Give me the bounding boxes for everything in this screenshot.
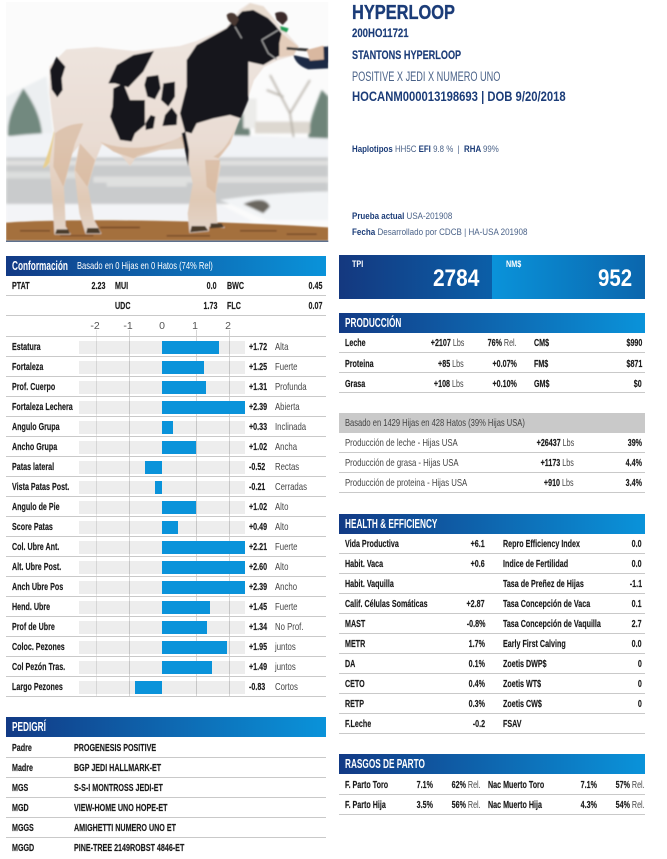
trait row: Alt. Ubre Post.: Alt. Ubre Post. bbox=[12, 561, 61, 573]
panel: calving traits bbox=[339, 754, 645, 815]
production row: Grasa: +108 Lbs bbox=[434, 378, 464, 390]
health row 5: -0.8% bbox=[466, 618, 485, 630]
pedigree row: MGS bbox=[6, 777, 326, 798]
registration code: 200HO11721 bbox=[352, 26, 409, 40]
trait row: Patas lateral bbox=[6, 456, 326, 477]
calving row: daughter: 56% Rel. bbox=[452, 799, 481, 811]
health row 3: Tasa de Preñez de Hijas bbox=[503, 578, 584, 590]
trait row: Angulo de Pie: +1.02 bbox=[249, 501, 267, 513]
trait row: Hend. Ubre: +1.45 bbox=[249, 601, 267, 613]
trait row: Coloc. Pezones: Coloc. Pezones bbox=[12, 641, 65, 653]
calving heading: RASGOS DE PARTO bbox=[345, 757, 425, 771]
trait row: Angulo Grupa: Inclinada bbox=[275, 421, 306, 433]
trait row: Angulo de Pie: Angulo de Pie bbox=[12, 501, 60, 513]
trait row: Col. Ubre Ant.: +2.21 bbox=[249, 541, 267, 553]
trait row: Vista Patas Post.: Vista Patas Post. bbox=[12, 481, 69, 493]
pedigree row: Madre: Madre bbox=[12, 762, 33, 774]
calving row: bull: 57% Rel. bbox=[616, 779, 645, 791]
production row: Proteina: FM$ bbox=[534, 358, 548, 370]
bull name heading: HYPERLOOP bbox=[352, 2, 455, 24]
health row 1 bbox=[339, 534, 645, 554]
health row 4: +2.87 bbox=[467, 598, 485, 610]
health row 9: RETP bbox=[345, 698, 364, 710]
trait row: Ancho Grupa: Ancho Grupa bbox=[12, 441, 57, 453]
summary row PTAT: 0.45 bbox=[308, 280, 322, 292]
trait row: Largo Pezones: -0.83 bbox=[249, 681, 265, 693]
health row 6: METR bbox=[345, 638, 365, 650]
trait row: Angulo Grupa: Angulo Grupa bbox=[12, 421, 60, 433]
health row 8 bbox=[339, 674, 645, 694]
health row 4: Tasa Concepción de Vaca bbox=[503, 598, 590, 610]
trait row: Col Pezón Tras. bbox=[6, 656, 326, 677]
trait row: Hend. Ubre: Fuerte bbox=[275, 601, 297, 613]
conformation heading bbox=[6, 256, 326, 276]
trait row: Fortaleza Lechera bbox=[6, 396, 326, 417]
health row 5: 2.7 bbox=[632, 618, 642, 630]
panel: production bbox=[339, 313, 645, 493]
health row 7: Zoetis DWP$ bbox=[503, 658, 547, 670]
summary row PTAT: PTAT bbox=[12, 280, 30, 292]
trait row: Vista Patas Post.: Cerradas bbox=[275, 481, 307, 493]
health heading: HEALTH & EFFICIENCY bbox=[345, 517, 437, 531]
pedigree row: MGD bbox=[6, 797, 326, 818]
health row 2: Habit. Vaca bbox=[345, 558, 383, 570]
health row 6: 1.7% bbox=[469, 638, 485, 650]
trait row: Hend. Ubre bbox=[6, 596, 326, 617]
trait row: Hend. Ubre: Hend. Ubre bbox=[12, 601, 50, 613]
trait row: Angulo de Pie: Alto bbox=[275, 501, 288, 513]
health row 10: -0.2 bbox=[473, 718, 485, 730]
trait row: Anch Ubre Pos: +2.39 bbox=[249, 581, 267, 593]
calving heading bbox=[339, 754, 645, 774]
health row 9 bbox=[339, 694, 645, 714]
daughters row: grasa: Producción de grasa - Hijas USA bbox=[345, 457, 459, 469]
production row: Grasa bbox=[339, 373, 645, 393]
trait row: Ancho Grupa: Ancha bbox=[275, 441, 297, 453]
pedigree row: MGGD bbox=[12, 842, 184, 854]
health row 1: Vida Productiva bbox=[345, 538, 399, 550]
pedigree row: Padre bbox=[6, 737, 326, 758]
chart axis: 0 bbox=[159, 320, 165, 332]
pedigree heading: PEDIGRÍ bbox=[12, 720, 46, 734]
panel: pedigree bbox=[6, 717, 326, 854]
trait row: Anch Ubre Pos: Ancho bbox=[275, 581, 297, 593]
trait row: Estatura: Alta bbox=[275, 341, 288, 353]
pedigree row: MGD: MGD bbox=[12, 802, 29, 814]
trait row: Col. Ubre Ant.: Col. Ubre Ant. bbox=[12, 541, 59, 553]
health row 2: 0.0 bbox=[632, 558, 642, 570]
health row 10 bbox=[339, 714, 645, 734]
calving row: bull: 7.1% bbox=[581, 779, 597, 791]
daughters basis banner: Basado en 1429 Hijas en 428 Hatos (39% Hijas USA) bbox=[345, 417, 525, 429]
trait row: Prof. Cuerpo: +1.31 bbox=[249, 381, 267, 393]
trait row: Score Patas: Score Patas bbox=[12, 521, 53, 533]
health row 3: Habit. Vaquilla bbox=[345, 578, 394, 590]
health row 2: Indice de Fertilidad bbox=[503, 558, 568, 570]
health row 7 bbox=[339, 654, 645, 674]
health row 1: Repro Efficiency Index bbox=[503, 538, 580, 550]
trait row: Angulo Grupa bbox=[6, 416, 326, 437]
health row 7: 0.1% bbox=[469, 658, 485, 670]
health row 9: 0.3% bbox=[469, 698, 485, 710]
production row: Grasa: +0.10% bbox=[493, 378, 517, 390]
calving row: daughter: 54% Rel. bbox=[616, 799, 645, 811]
TPI label: TPI bbox=[352, 259, 363, 269]
calving row: daughter: 4.3% bbox=[581, 799, 597, 811]
trait row: Prof. Cuerpo: Prof. Cuerpo bbox=[12, 381, 55, 393]
calving row: bull: 62% Rel. bbox=[452, 779, 481, 791]
health row 8: 0 bbox=[638, 678, 642, 690]
production row: Grasa: $0 bbox=[634, 378, 642, 390]
health row 5 bbox=[339, 614, 645, 634]
production row: Proteina: +85 Lbs bbox=[438, 358, 464, 370]
daughters row: leche: Producción de leche - Hijas USA bbox=[345, 437, 458, 449]
health row 8: Zoetis WT$ bbox=[503, 678, 541, 690]
summary row PTAT bbox=[6, 276, 326, 296]
trait row: Alt. Ubre Post. bbox=[6, 556, 326, 577]
conformation heading: Conformación bbox=[12, 259, 68, 273]
trait row: Vista Patas Post. bbox=[6, 476, 326, 497]
daughters row: proteina: Producción de proteina - Hijas USA bbox=[345, 477, 467, 489]
trait row: Prof. Cuerpo bbox=[6, 376, 326, 397]
health row 4: 0.1 bbox=[632, 598, 642, 610]
calving row: bull: 7.1% bbox=[417, 779, 433, 791]
production row: Grasa: GM$ bbox=[534, 378, 549, 390]
trait row: Fortaleza: +1.25 bbox=[249, 361, 267, 373]
pedigree row: MGD: VIEW-HOME UNO HOPE-ET bbox=[74, 802, 167, 814]
trait row: Patas lateral: -0.52 bbox=[249, 461, 265, 473]
pedigree row: MGS: S-S-I MONTROSS JEDI-ET bbox=[74, 782, 163, 794]
chart axis: -2 bbox=[90, 320, 100, 332]
health row 2 bbox=[339, 554, 645, 574]
daughters row: proteina bbox=[339, 473, 645, 493]
trait row: Prof de Ubre: Prof de Ubre bbox=[12, 621, 55, 633]
calving row: daughter: F. Parto Hija bbox=[345, 799, 386, 811]
trait row: Col Pezón Tras.: +1.49 bbox=[249, 661, 267, 673]
trait row: Alt. Ubre Post.: Alto bbox=[275, 561, 288, 573]
production row: Leche: CM$ bbox=[534, 337, 549, 349]
trait row: Ancho Grupa bbox=[6, 436, 326, 457]
production row: Leche: $990 bbox=[626, 337, 642, 349]
production row: Leche: +2107 Lbs bbox=[430, 337, 464, 349]
health row 7: DA bbox=[345, 658, 355, 670]
trait row: Coloc. Pezones: juntos bbox=[275, 641, 296, 653]
trait row: Anch Ubre Pos bbox=[6, 576, 326, 597]
trait row: Fortaleza Lechera: +2.39 bbox=[249, 401, 267, 413]
panel: health and efficiency bbox=[339, 514, 645, 734]
pedigree row: MGS: MGS bbox=[12, 782, 28, 794]
daughters row: grasa bbox=[339, 453, 645, 473]
health row 6: 0.0 bbox=[632, 638, 642, 650]
daughters row: leche bbox=[339, 433, 645, 453]
summary row PTAT: 2.23 bbox=[91, 280, 105, 292]
health row 5: Tasa Concepción de Vaquilla bbox=[503, 618, 601, 630]
trait row: Anch Ubre Pos: Anch Ubre Pos bbox=[12, 581, 63, 593]
pedigree row: MGGS: MGGS bbox=[12, 822, 34, 834]
daughters row: leche: +26437 Lbs bbox=[536, 437, 574, 449]
trait row: Col. Ubre Ant.: Fuerte bbox=[275, 541, 297, 553]
trait row: Angulo de Pie bbox=[6, 496, 326, 517]
photo: Holstein bull standing in snow bbox=[6, 2, 328, 242]
health row 3 bbox=[339, 574, 645, 594]
production row: Leche bbox=[339, 333, 645, 353]
trait row: Estatura: Estatura bbox=[12, 341, 41, 353]
trait row: Score Patas: Alto bbox=[275, 521, 288, 533]
health row 8: 0.4% bbox=[469, 678, 485, 690]
health row 5: MAST bbox=[345, 618, 365, 630]
trait row: Fortaleza bbox=[6, 356, 326, 377]
trait row: Fortaleza: Fuerte bbox=[275, 361, 297, 373]
full name: STANTONS HYPERLOOP bbox=[352, 48, 461, 62]
summary row UDC: UDC bbox=[115, 300, 130, 312]
summary row PTAT: BWC bbox=[227, 280, 244, 292]
current proof text: Prueba actual USA-201908 bbox=[352, 211, 452, 222]
health heading bbox=[339, 514, 645, 534]
ID and date of birth: HOCANM000013198693 | DOB 9/20/2018 bbox=[352, 89, 566, 104]
chart axis: 1 bbox=[192, 320, 198, 332]
NM$ value: 952 bbox=[598, 265, 632, 292]
trait row: Estatura: +1.72 bbox=[249, 341, 267, 353]
daughters row: leche: 39% bbox=[628, 437, 642, 449]
pedigree row: Padre: Padre bbox=[12, 742, 32, 754]
health row 4: Calif. Células Somáticas bbox=[345, 598, 428, 610]
calving row: daughter: Nac Muerto Hija bbox=[488, 799, 542, 811]
production row: Grasa: Grasa bbox=[345, 378, 365, 390]
trait row: Score Patas: +0.49 bbox=[249, 521, 267, 533]
health row 10: F.Leche bbox=[345, 718, 371, 730]
trait row: Col Pezón Tras.: juntos bbox=[275, 661, 296, 673]
pedigree row: Madre bbox=[6, 757, 326, 778]
summary row PTAT: 0.0 bbox=[207, 280, 217, 292]
health row 6: Early First Calving bbox=[503, 638, 566, 650]
panel: TPI score bbox=[339, 255, 492, 299]
calving row: daughter: 3.5% bbox=[417, 799, 433, 811]
health row 10: FSAV bbox=[503, 718, 522, 730]
health row 1: 0.0 bbox=[632, 538, 642, 550]
pedigree row: MGGS bbox=[6, 817, 326, 838]
pedigree row: MGGD: MGGD bbox=[12, 842, 34, 854]
trait row: Prof. Cuerpo: Profunda bbox=[275, 381, 307, 393]
health row 8: CETO bbox=[345, 678, 365, 690]
pedigree row: Madre: BGP JEDI HALLMARK-ET bbox=[74, 762, 161, 774]
pedigree row: MGGD: PINE-TREE 2149ROBST 4846-ET bbox=[74, 842, 184, 854]
trait row: Coloc. Pezones bbox=[6, 636, 326, 657]
trait row: Patas lateral: Rectas bbox=[275, 461, 299, 473]
calving row: daughter bbox=[339, 794, 645, 815]
health row 1: +6.1 bbox=[471, 538, 485, 550]
pedigree heading bbox=[6, 717, 326, 737]
conformation heading: Basado en 0 Hijas en 0 Hatos (74% Rel) bbox=[77, 260, 213, 272]
calving row: bull bbox=[339, 774, 645, 795]
panel: conformation bbox=[6, 256, 326, 697]
daughters basis banner bbox=[339, 413, 645, 433]
health row 6 bbox=[339, 634, 645, 654]
trait row: Fortaleza Lechera: Abierta bbox=[275, 401, 300, 413]
chart axis: 2 bbox=[225, 320, 231, 332]
trait row: Estatura bbox=[6, 336, 326, 357]
trait row: Largo Pezones: Largo Pezones bbox=[12, 681, 63, 693]
production row: Leche: Leche bbox=[345, 337, 366, 349]
summary row UDC bbox=[6, 296, 326, 316]
pedigree line: POSITIVE X JEDI X NUMERO UNO bbox=[352, 69, 500, 84]
TPI value: 2784 bbox=[433, 265, 479, 292]
health row 3: -1.1 bbox=[630, 578, 642, 590]
health row 9: 0 bbox=[638, 698, 642, 710]
pedigree row: Padre: PROGENESIS POSITIVE bbox=[74, 742, 156, 754]
trait row: Angulo Grupa: +0.33 bbox=[249, 421, 267, 433]
health row 4 bbox=[339, 594, 645, 614]
trait row: Vista Patas Post.: -0.21 bbox=[249, 481, 265, 493]
trait row: Fortaleza: Fortaleza bbox=[12, 361, 43, 373]
summary row UDC: FLC bbox=[227, 300, 241, 312]
daughters row: proteina: +910 Lbs bbox=[544, 477, 574, 489]
haplotypes text: Haplotipos HH5C EFI 9.8 % | RHA 99% bbox=[352, 144, 499, 155]
production row: Leche: 76% Rel. bbox=[488, 337, 517, 349]
trait row: Prof de Ubre: +1.34 bbox=[249, 621, 267, 633]
production row: Proteina: Proteina bbox=[345, 358, 374, 370]
production row: Proteina: +0.07% bbox=[493, 358, 517, 370]
date text: Fecha Desarrollado por CDCB | HA-USA 201908 bbox=[352, 227, 527, 238]
chart axis bbox=[6, 316, 326, 337]
trait row: Patas lateral: Patas lateral bbox=[12, 461, 54, 473]
trait row: Prof de Ubre bbox=[6, 616, 326, 637]
trait row: Score Patas bbox=[6, 516, 326, 537]
summary row UDC: 1.73 bbox=[203, 300, 217, 312]
production row: Proteina: $871 bbox=[626, 358, 642, 370]
NM$ label: NM$ bbox=[506, 259, 521, 269]
production row: Proteina bbox=[339, 353, 645, 373]
trait row: Col Pezón Tras.: Col Pezón Tras. bbox=[12, 661, 65, 673]
trait row: Alt. Ubre Post.: +2.60 bbox=[249, 561, 267, 573]
summary row UDC: 0.07 bbox=[308, 300, 322, 312]
calving row: bull: F. Parto Toro bbox=[345, 779, 388, 791]
trait row: Prof de Ubre: No Prof. bbox=[275, 621, 304, 633]
trait row: Largo Pezones: Cortos bbox=[275, 681, 298, 693]
trait row: Coloc. Pezones: +1.95 bbox=[249, 641, 267, 653]
daughters row: grasa: 4.4% bbox=[626, 457, 642, 469]
calving row: bull: Nac Muerto Toro bbox=[488, 779, 544, 791]
daughters row: proteina: 3.4% bbox=[626, 477, 642, 489]
chart axis: -1 bbox=[123, 320, 133, 332]
health row 7: 0 bbox=[638, 658, 642, 670]
daughters row: grasa: +1173 Lbs bbox=[541, 457, 574, 469]
summary row PTAT: MUI bbox=[115, 280, 128, 292]
trait row: Ancho Grupa: +1.02 bbox=[249, 441, 267, 453]
production heading: PRODUCCIÓN bbox=[345, 316, 401, 330]
production heading bbox=[339, 313, 645, 333]
health row 9: Zoetis CW$ bbox=[503, 698, 542, 710]
pedigree row: MGGS: AMIGHETTI NUMERO UNO ET bbox=[74, 822, 176, 834]
panel: NM$ score bbox=[492, 255, 645, 299]
trait row: Col. Ubre Ant. bbox=[6, 536, 326, 557]
health row 2: +0.6 bbox=[471, 558, 485, 570]
trait row: Largo Pezones bbox=[6, 676, 326, 697]
trait row: Fortaleza Lechera: Fortaleza Lechera bbox=[12, 401, 73, 413]
